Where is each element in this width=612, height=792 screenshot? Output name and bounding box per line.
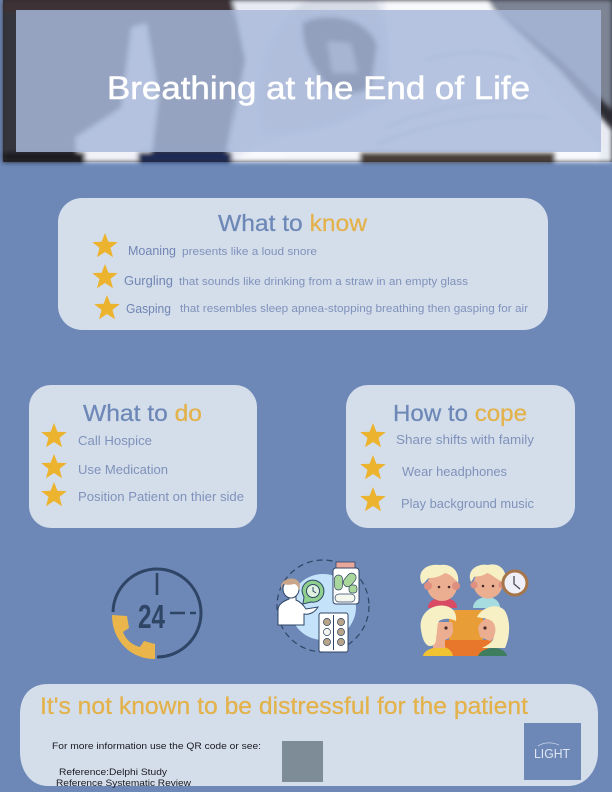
reference: delphi study: Reference:Delphi Study bbox=[59, 767, 167, 778]
item: gasping: that resembles sleep apnea-stopping breathing then gasping for air bbox=[180, 303, 528, 315]
item: call hospice: Call Hospice bbox=[78, 433, 152, 448]
clock bbox=[503, 571, 527, 595]
panel: what to do bbox=[29, 385, 257, 528]
panel: what to know bbox=[58, 198, 548, 330]
item: background music: Play background music bbox=[401, 496, 534, 511]
family member front left bbox=[421, 606, 456, 656]
family member front right bbox=[477, 606, 509, 656]
heading: what to know: What to know bbox=[218, 210, 367, 236]
item: position patient: Position Patient on thier side bbox=[78, 489, 244, 504]
family member top right bbox=[470, 564, 506, 608]
item: gurgling: Gurgling bbox=[124, 273, 173, 288]
item: moaning: presents like a loud snore bbox=[182, 246, 317, 258]
icon: family group bbox=[420, 564, 527, 656]
heading: how to cope: How to cope bbox=[393, 400, 527, 426]
item: moaning: Moaning bbox=[128, 243, 176, 258]
QR code placeholder bbox=[282, 741, 323, 782]
pill bottle bbox=[333, 562, 359, 604]
item: gasping: Gasping bbox=[126, 301, 171, 316]
panel: how to cope bbox=[346, 385, 575, 528]
person bbox=[278, 578, 318, 625]
title: Breathing at the End of Life bbox=[107, 70, 530, 106]
reference: systematic review: Reference Systematic Review bbox=[56, 778, 191, 789]
header photo: patient resting on pillows bbox=[3, 0, 612, 162]
item: background music bbox=[360, 487, 534, 511]
item: wear headphones bbox=[360, 455, 507, 479]
item: call hospice bbox=[41, 423, 152, 448]
table bbox=[440, 610, 492, 656]
icon: patient and medication bbox=[277, 560, 369, 652]
item: moaning bbox=[92, 233, 317, 258]
more information text: For more information use the QR code or see: bbox=[52, 741, 261, 752]
item: share shifts bbox=[360, 423, 535, 447]
item: use medication: Use Medication bbox=[78, 462, 168, 477]
speech bubble with clock bbox=[302, 580, 324, 604]
headline: It's not known to be distressful for the patient bbox=[40, 693, 528, 720]
item: share shifts: Share shifts with family bbox=[396, 432, 535, 447]
icon: 24 hour phone clock: 24 bbox=[138, 598, 165, 635]
item: gurgling bbox=[92, 264, 469, 288]
item: use medication bbox=[41, 454, 168, 478]
logo: Light bbox=[524, 723, 581, 780]
panel: footer bbox=[20, 684, 598, 789]
title banner bbox=[16, 10, 601, 152]
item: gurgling: that sounds like drinking from a straw in an empty glass bbox=[179, 276, 469, 288]
icon: 24 hour phone clock bbox=[112, 569, 201, 659]
blister pack bbox=[319, 613, 348, 652]
family member top left bbox=[420, 565, 460, 608]
item: position patient bbox=[41, 482, 244, 506]
item: gasping bbox=[94, 295, 528, 319]
item: wear headphones: Wear headphones bbox=[402, 464, 507, 479]
logo: Light: LIGHT bbox=[534, 747, 570, 761]
heading: what to do: What to do bbox=[83, 400, 202, 426]
